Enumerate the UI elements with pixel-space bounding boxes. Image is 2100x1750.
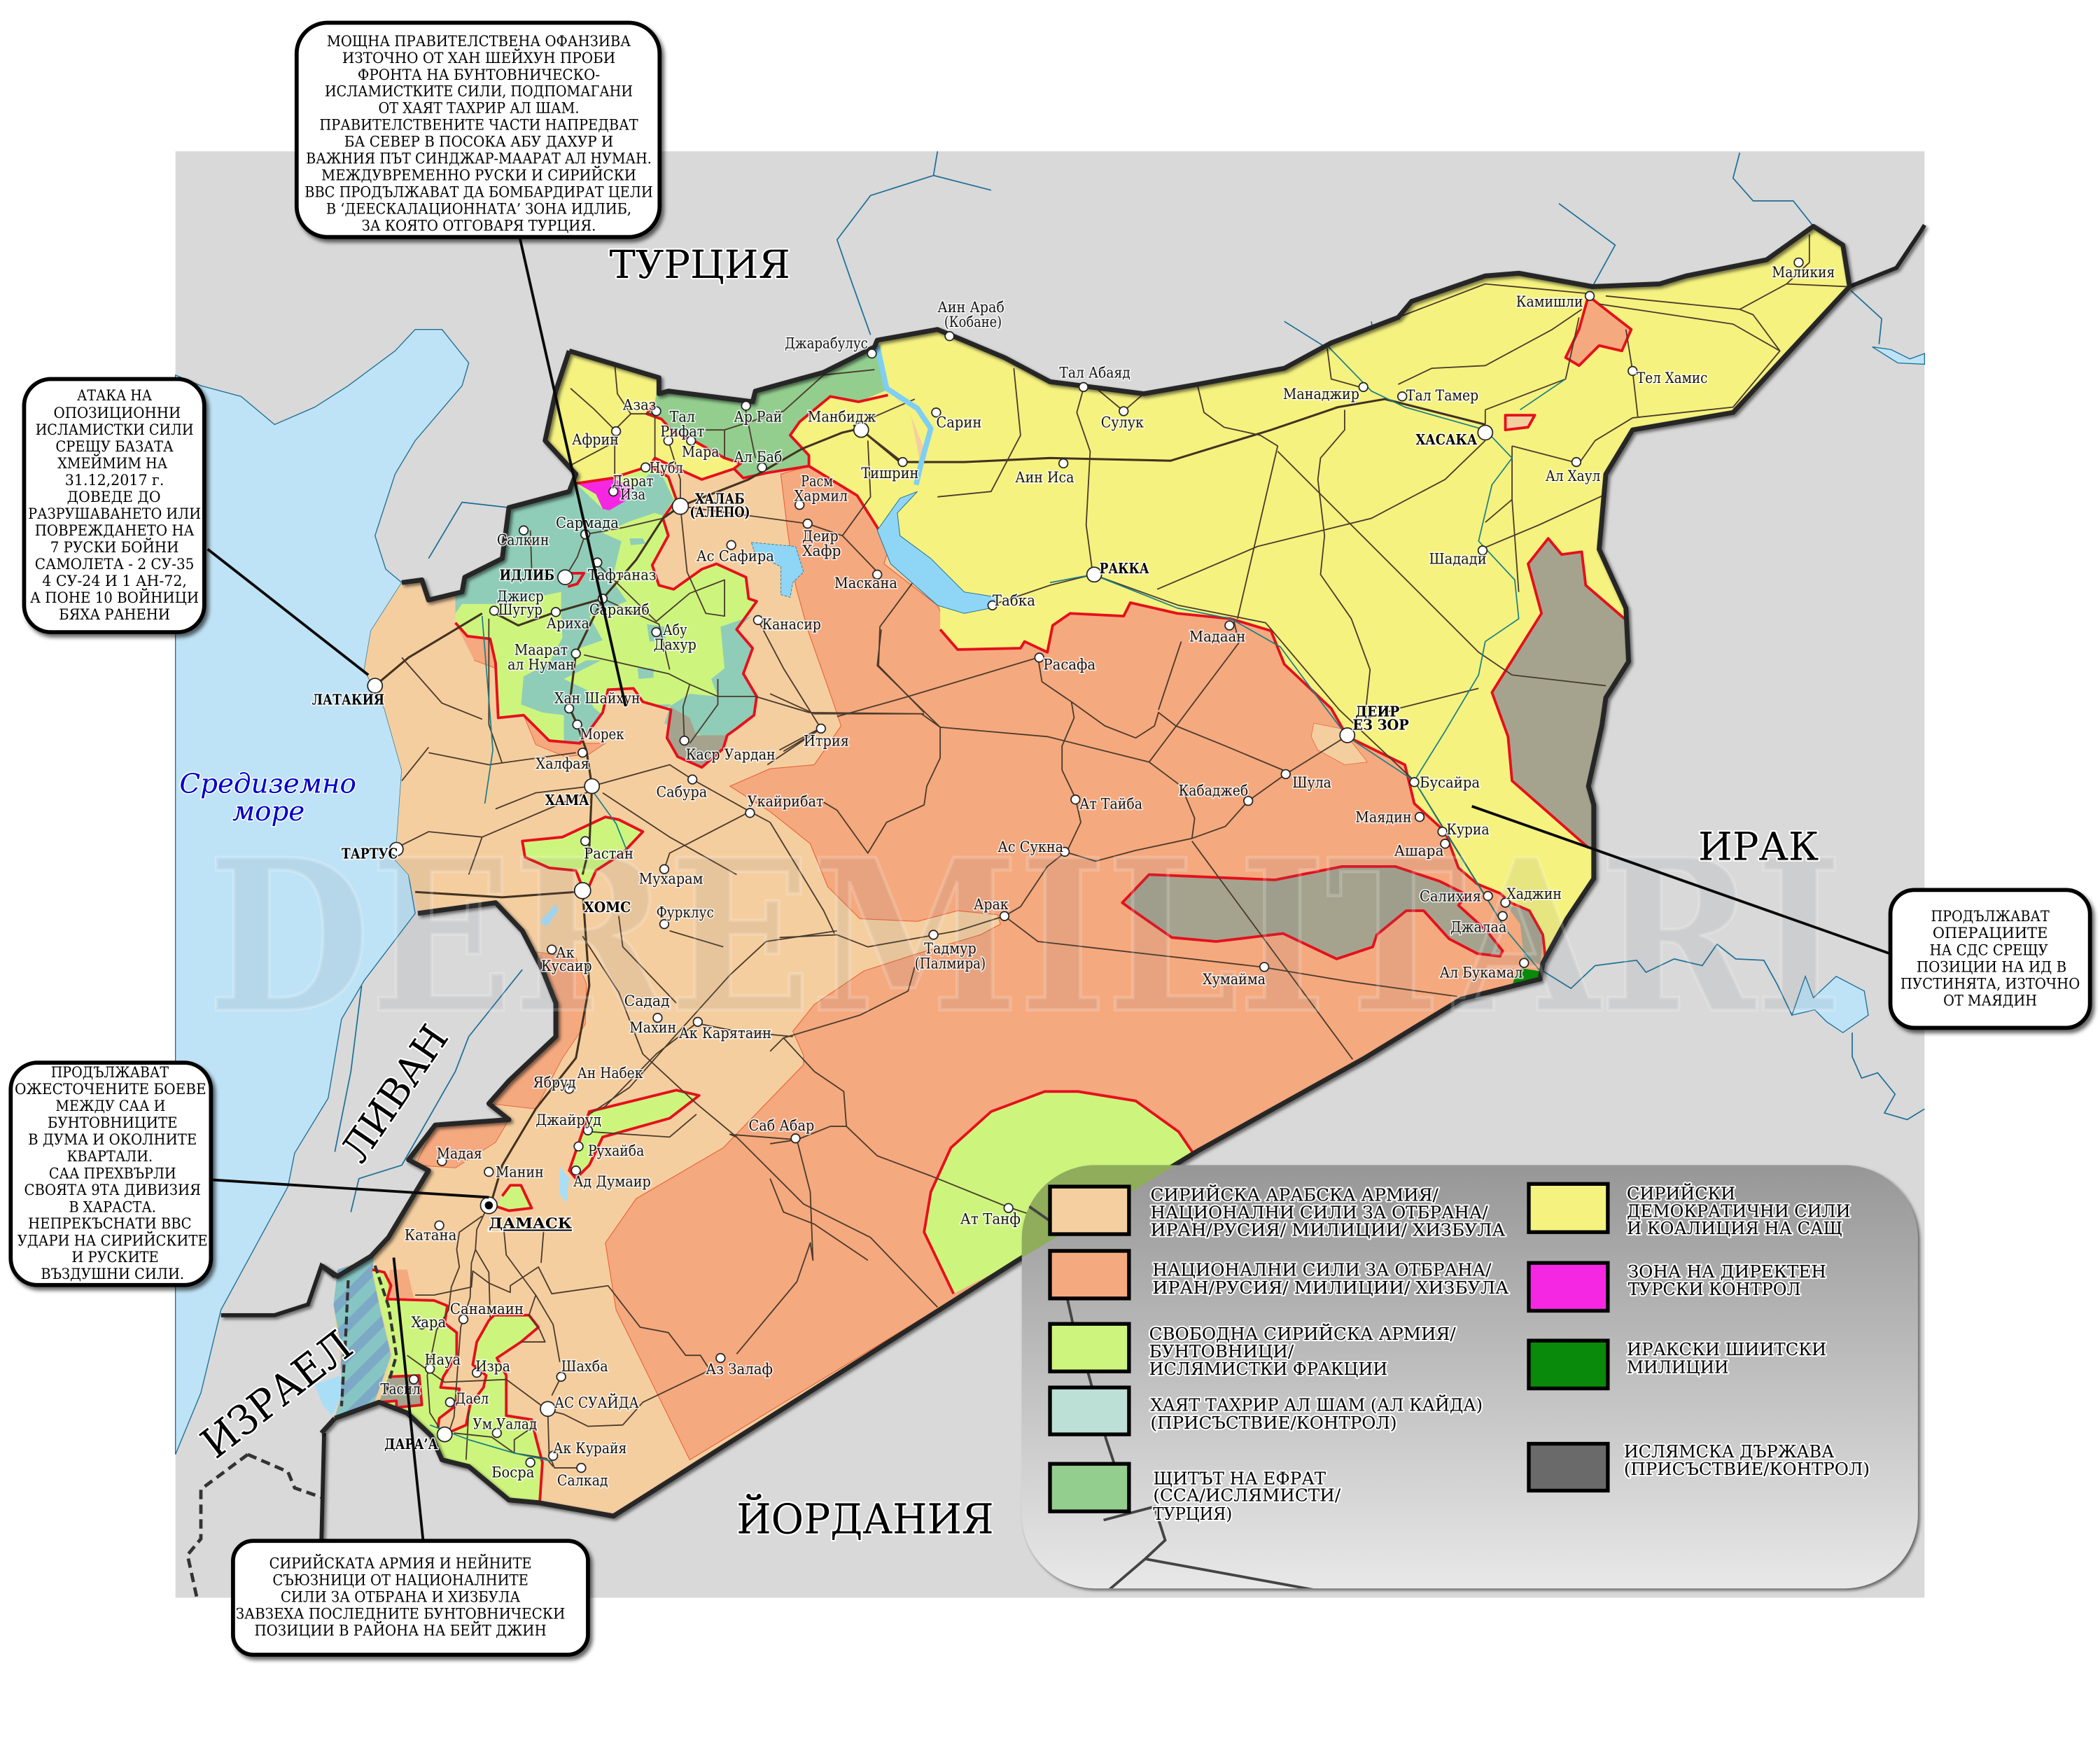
callout: Khan Sheikhoun offensive: В ‘ДЕЕСКАЛАЦИОННАТА’ ЗОНА ИДЛИБ, — [326, 201, 631, 218]
city labels: Маскана — [834, 574, 897, 592]
callout: SDF operations: ПРОДЪЛЖАВАТ — [1931, 908, 2050, 925]
city labels: Маарат — [514, 641, 568, 659]
roads — [375, 234, 1847, 1468]
city labels: Ашара — [1394, 842, 1443, 860]
heading: Mediterranean sea — [179, 769, 356, 827]
legend: Syrian Arab Army: НАЦИОНАЛНИ СИЛИ ЗА ОТБРАНА/ — [1150, 1203, 1488, 1222]
city labels: ХАСАКА — [1415, 431, 1478, 448]
callout: Khan Sheikhoun offensive — [297, 23, 659, 237]
zone: Eastern Ghouta — [497, 1185, 532, 1211]
legend: Iraqi Shia militias: ИРАКСКИ ШИИТСКИ — [1627, 1340, 1826, 1359]
zone: national defence forces east — [606, 466, 1546, 1460]
callout: Khan Sheikhoun offensive: ПРАВИТЕЛСТВЕНИТЕ ЧАСТИ НАПРЕДВАТ — [319, 117, 638, 134]
legend: Syrian Arab Army: СИРИЙСКА АРАБСКА АРМИЯ/ — [1150, 1184, 1439, 1205]
zone: rebel Idlib light green — [455, 468, 755, 741]
city labels: Катана — [405, 1226, 456, 1244]
callout: Douma fighting: ПРОДЪЛЖАВАТ — [51, 1064, 169, 1082]
city labels: Саракиб — [589, 601, 650, 618]
city labels: Рухайба — [588, 1142, 644, 1159]
city labels: ЛАТАКИЯ — [312, 691, 384, 708]
zone: Afrin and Tal Rifaat yellow — [547, 354, 738, 482]
city labels: Маликия — [1772, 263, 1835, 281]
city labels: Аин Араб — [937, 298, 1004, 316]
city labels: Ар Рай — [734, 408, 782, 426]
city labels: Садад — [624, 992, 670, 1009]
legend: national defence forces — [1050, 1251, 1509, 1298]
city labels: Бусайра — [1420, 774, 1480, 791]
callout: Hmeimim attack: 7 РУСКИ БОЙНИ — [50, 537, 178, 556]
callout: Khan Sheikhoun offensive: ВВС ПРОДЪЛЖАВАТ ДА БОМБАРДИРАТ ЦЕЛИ — [304, 184, 653, 202]
legend: Syrian Arab Army: ИРАН/РУСИЯ/ МИЛИЦИИ/ ХИЗБУЛА — [1150, 1220, 1506, 1240]
zone: Eastern Qalamoun — [569, 1090, 699, 1179]
city labels: Ак Курайя — [553, 1439, 626, 1457]
heading: Israel: ИЗРАЕЛ — [192, 1321, 361, 1468]
callout: Douma fighting: БУНТОВНИЦИТЕ — [48, 1114, 178, 1132]
legend: Euphrates Shield: (ССА/ИСЛЯМИСТИ/ — [1153, 1486, 1341, 1506]
callout: Beit Jinn: СИЛИ ЗА ОТБРАНА И ХИЗБУЛА — [281, 1588, 520, 1606]
legend: free Syrian army: ИСЛЯМИСТКИ ФРАКЦИИ — [1149, 1359, 1387, 1379]
legend: Euphrates Shield: ЩИТЪТ НА ЕФРАТ — [1153, 1469, 1326, 1488]
city labels: ИДЛИБ — [500, 566, 554, 583]
callout: Douma fighting: И РУСКИТЕ — [71, 1249, 159, 1266]
callout: Hmeimim attack: ПОВРЕЖДАНЕТО НА — [35, 522, 195, 540]
city labels: Манбидж — [808, 408, 876, 426]
legend: Turkish control — [1529, 1262, 1826, 1311]
legend: Islamic State: (ПРИСЪСТВИЕ/КОНТРОЛ) — [1624, 1460, 1870, 1479]
callout: Douma fighting: ОЖЕСТОЧЕНИТЕ БОЕВЕ — [15, 1081, 206, 1098]
legend: Syrian Democratic Forces — [1529, 1182, 1851, 1238]
legend: Hayat Tahrir al-Sham — [1050, 1387, 1483, 1434]
city labels: Ат Танф — [960, 1210, 1021, 1228]
city labels: Азаз — [623, 396, 657, 413]
city labels: Деир — [802, 527, 839, 545]
city labels: Ум Уалад — [472, 1415, 537, 1432]
city labels: Дарат — [612, 472, 654, 490]
city labels: Сарин — [936, 413, 981, 430]
city labels: Ябруд — [533, 1074, 576, 1091]
small lakes — [315, 904, 569, 1415]
city labels: Рифат — [660, 423, 704, 440]
callout: Khan Sheikhoun offensive: ВАЖНИЯ ПЪТ СИНДЖАР-МААРАТ АЛ НУМАН. — [306, 150, 652, 168]
legend: Euphrates Shield: ТУРЦИЯ) — [1153, 1504, 1232, 1524]
callout: Khan Sheikhoun offensive: ОТ ХАЯТ ТАХРИР АЛ ШАМ. — [378, 100, 579, 118]
city labels: (Палмира) — [915, 954, 986, 972]
callout: SDF operations: ОТ МАЯДИН — [1943, 992, 2037, 1009]
zone: Hasakah regime — [1506, 415, 1535, 430]
city labels: ХОМС — [584, 899, 631, 916]
city labels: Тел Хамис — [1637, 369, 1707, 386]
city labels: Салихия — [1420, 888, 1481, 905]
legend panel — [937, 1150, 1918, 1599]
city labels: Босра — [491, 1463, 534, 1480]
legend: Syrian Democratic Forces: ДЕМОКРАТИЧНИ СИЛИ — [1627, 1202, 1851, 1222]
city labels: Тал — [670, 408, 695, 426]
legend: Syrian Democratic Forces: И КОАЛИЦИЯ НА САЩ — [1627, 1219, 1842, 1238]
city labels: Каср Уардан — [686, 746, 776, 763]
rivers inside Syria — [430, 346, 1566, 1461]
city labels: Камишли — [1516, 293, 1583, 310]
city labels: Ал Хаул — [1546, 467, 1600, 484]
Syria border — [321, 226, 1849, 1516]
zone: ISIS pocket Qasr Wardan — [667, 707, 727, 767]
callout: Douma fighting: В ХАРАСТА. — [69, 1198, 156, 1216]
legend: Islamic State — [1529, 1442, 1870, 1490]
legend: Syrian Arab Army — [1050, 1184, 1506, 1240]
city labels: Табка — [993, 592, 1035, 609]
city labels: Изра — [475, 1357, 510, 1375]
At Tanf showing through legend — [937, 1150, 1365, 1599]
city labels: Ад Думаир — [573, 1172, 651, 1190]
city labels: Итрия — [804, 732, 849, 750]
legend: Turkish control: ЗОНА НА ДИРЕКТЕН — [1628, 1262, 1826, 1282]
callout: Douma fighting: МЕЖДУ САА И — [55, 1098, 165, 1115]
zone: Golan — [333, 1258, 391, 1417]
callout: Hmeimim attack: САМОЛЕТА - 2 СУ-35 — [35, 556, 194, 573]
heading: Iraq: ИРАК — [1698, 825, 1819, 869]
city labels — [312, 263, 1835, 1489]
city labels: Манаджир — [1283, 385, 1359, 402]
watermark: DEREMILITARI — [208, 815, 1843, 1060]
city labels: Тал Абаяд — [1059, 364, 1130, 382]
city labels: Шадади — [1429, 550, 1487, 567]
callout: Beit Jinn — [233, 1541, 588, 1655]
legend: national defence forces: НАЦИОНАЛНИ СИЛИ ЗА ОТБРАНА/ — [1152, 1261, 1492, 1280]
zone: Tasil ISIS — [379, 1376, 422, 1408]
city labels: Канасир — [762, 615, 821, 633]
city labels: Халфая — [536, 755, 589, 772]
city labels: Науа — [425, 1351, 461, 1368]
city labels: Ал Баб — [734, 448, 782, 465]
city labels: Хафр — [802, 542, 841, 559]
legend: Iraqi Shia militias: МИЛИЦИИ — [1627, 1357, 1728, 1377]
city labels: Хармил — [794, 487, 848, 505]
zone: Euphrates Shield green — [649, 349, 886, 477]
city labels: Аз Залаф — [706, 1360, 773, 1378]
zone: Turkish control magenta — [578, 478, 634, 510]
city labels: Кабаджеб — [1179, 781, 1248, 799]
legend: Iraqi Shia militias — [1529, 1340, 1826, 1388]
teal patches — [629, 538, 666, 679]
city labels: Ан Набек — [578, 1064, 643, 1082]
legend: Syrian Democratic Forces: СИРИЙСКИ — [1627, 1182, 1735, 1203]
city labels: Махин — [629, 1018, 676, 1036]
callout: Beit Jinn: ЗАВЗЕХА ПОСЛЕДНИТЕ БУНТОВНИЧЕСКИ — [236, 1606, 565, 1623]
heading: Mediterranean sea: море — [232, 796, 304, 827]
callout: SDF operations: ОПЕРАЦИИТЕ — [1933, 925, 2047, 942]
Golan ceasefire dashed lines — [342, 1266, 396, 1406]
callout: Khan Sheikhoun offensive: МОЩНА ПРАВИТЕЛСТВЕНА ОФАНЗИВА — [327, 33, 631, 50]
zone: HTS teal north — [456, 474, 673, 746]
callout: Douma fighting — [10, 1063, 211, 1285]
city labels: Мадаан — [1189, 627, 1245, 645]
callout: Khan Sheikhoun offensive: МЕЖДУВРЕМЕННО РУСКИ И СИРИЙСКИ — [321, 165, 636, 185]
callout: Khan Sheikhoun offensive: ИСЛАМИСТКИТЕ СИЛИ, ПОДПОМАГАНИ — [325, 83, 633, 101]
callout: Hmeimim attack: ДОВЕДЕ ДО — [67, 489, 161, 506]
zone: Iraqi Shia militias — [1512, 968, 1540, 986]
callout: Hmeimim attack: ИСЛАМИСТКИ СИЛИ — [36, 421, 193, 439]
zone: HTS teal east — [643, 616, 757, 735]
background map frame — [176, 151, 1924, 1598]
legend: Hayat Tahrir al-Sham: (ПРИСЪСТВИЕ/КОНТРОЛ) — [1150, 1413, 1397, 1433]
lake at Turkey-Iraq border — [1872, 347, 1924, 364]
Euphrates river — [877, 346, 931, 485]
city labels: Мухарам — [639, 870, 704, 888]
city labels: Даел — [456, 1390, 489, 1407]
Mediterranean sea — [176, 330, 469, 1455]
city labels: Джайруд — [536, 1111, 601, 1128]
legend: free Syrian army — [1050, 1323, 1456, 1379]
callout: Hmeimim attack: РАЗРУШАВАНЕТО ИЛИ — [28, 505, 201, 523]
control zones — [333, 230, 1847, 1501]
city labels: Африн — [572, 430, 619, 448]
city labels: Хаджин — [1506, 885, 1562, 902]
callout: Hmeimim attack: 31.12,2017 г. — [65, 472, 164, 489]
city labels: Джалаа — [1450, 918, 1506, 936]
city labels: Нубл — [650, 458, 683, 476]
zone: Ar Rastan pocket — [522, 817, 643, 895]
zone: Daraa rebels west — [372, 1270, 542, 1506]
callout: Khan Sheikhoun offensive: ИЗТОЧНО ОТ ХАН ШЕЙХУН ПРОБИ — [342, 48, 615, 67]
callout: Douma fighting: УДАРИ НА СИРИЙСКИТЕ — [18, 1230, 208, 1250]
callout: SDF operations — [1891, 890, 2090, 1028]
heading: Mediterranean sea: Средиземно — [179, 769, 356, 800]
city labels: ТАРТУС — [342, 845, 398, 862]
city labels: Манин — [496, 1163, 544, 1181]
zone: western orange pockets — [415, 623, 606, 1168]
callout: Douma fighting: САА ПРЕХВЪРЛИ — [49, 1165, 176, 1182]
city labels: Расм — [801, 472, 833, 490]
Syria base territory — [333, 226, 1849, 1516]
city labels: Сармада — [556, 514, 619, 531]
city labels: Шугур — [498, 601, 542, 618]
city labels: Мадая — [437, 1144, 482, 1162]
callout: Khan Sheikhoun offensive: ЗА КОЯТО ОТГОВАРЯ ТУРЦИЯ. — [362, 217, 596, 234]
city labels: Ас Сукна — [997, 838, 1063, 855]
city labels: Тафтаназ — [588, 566, 657, 583]
city labels: Тасил — [380, 1380, 421, 1398]
zone: Deir ez Zor regime — [1311, 723, 1367, 764]
city labels: Ал Букамал — [1440, 964, 1522, 981]
callout: Hmeimim attack: СРЕЩУ БАЗАТА — [55, 438, 174, 456]
city labels: Укайрибат — [748, 792, 824, 810]
callout: Khan Sheikhoun offensive: БА СЕВЕР В ПОСОКА АБУ ДАХУР И — [344, 134, 613, 151]
callout: Douma fighting: ВЪЗДУШНИ СИЛИ. — [41, 1266, 184, 1283]
city labels: Джарабулус — [785, 334, 868, 351]
callout: Hmeimim attack: АТАКА НА — [77, 387, 152, 405]
city labels: Салкад — [557, 1471, 608, 1489]
city labels: ХАМА — [545, 792, 589, 808]
city labels: Куриа — [1446, 820, 1490, 838]
callout: Hmeimim attack: ХМЕЙМИМ НА — [57, 453, 167, 472]
legend: Islamic State: ИСЛЯМСКА ДЪРЖАВА — [1624, 1442, 1835, 1462]
zone: ISIS strip near Al Bukamal — [1506, 904, 1543, 965]
city labels: АС СУАЙДА — [554, 1394, 639, 1411]
callout: SDF operations: НА СДС СРЕЩУ — [1930, 941, 2048, 959]
legend: national defence forces: ИРАН/РУСИЯ/ МИЛИЦИИ/ ХИЗБУЛА — [1152, 1278, 1509, 1298]
city labels: ДАРА’А — [384, 1436, 438, 1452]
callout: Douma fighting: СВОЯТА 9ТА ДИВИЗИЯ — [24, 1182, 201, 1199]
zone: ISIS central pocket — [1122, 867, 1503, 959]
legend: Hayat Tahrir al-Sham: ХАЯТ ТАХРИР АЛ ШАМ (АЛ КАЙДА) — [1150, 1394, 1483, 1415]
city labels: ЕЗ ЗОР — [1352, 717, 1409, 734]
legend: free Syrian army: СВОБОДНА СИРИЙСКА АРМИЯ/ — [1149, 1323, 1456, 1344]
heading: Turkey: ТУРЦИЯ — [610, 243, 790, 288]
city labels: Морек — [580, 725, 624, 743]
city labels: Ариха — [547, 614, 589, 631]
city labels: ХАЛАБ — [695, 490, 745, 507]
city labels: Иза — [620, 486, 645, 503]
city labels: (Кобане) — [944, 313, 1002, 330]
city labels: ДАМАСК — [489, 1214, 573, 1231]
zone: SDF north-east yellow — [878, 230, 1847, 952]
zone: Beit Jinn orange — [387, 1270, 414, 1299]
callout: Beit Jinn: СЪЮЗНИЦИ ОТ НАЦИОНАЛНИТЕ — [272, 1572, 528, 1590]
Lake Jabbul — [751, 542, 804, 597]
callout: Hmeimim attack: ОПОЗИЦИОННИ — [54, 405, 181, 422]
city labels: Расафа — [1043, 656, 1096, 673]
city labels: (АЛЕПО) — [690, 504, 750, 521]
city labels: Саб Абар — [749, 1116, 814, 1134]
callout: Douma fighting: КВАРТАЛИ. — [67, 1148, 153, 1166]
city labels: Сабура — [657, 783, 707, 800]
callout: Douma fighting: НЕПРЕКЪСНАТИ ВВС — [28, 1215, 192, 1233]
city labels: Джиср — [497, 587, 544, 605]
callout: Douma fighting: В ДУМА И ОКОЛНИТЕ — [28, 1131, 197, 1149]
legend: free Syrian army: БУНТОВНИЦИ/ — [1149, 1342, 1294, 1362]
city labels: Кусаир — [541, 957, 592, 974]
city labels: Ас Сафира — [696, 547, 774, 565]
zone: ISIS east desert — [1492, 538, 1647, 857]
zone: Qamishli regime — [1566, 296, 1631, 365]
callout: Hmeimim attack: А ПОНЕ 10 ВОЙНИЦИ — [30, 587, 199, 607]
city labels: Шула — [1292, 774, 1331, 791]
city labels: Тишрин — [861, 464, 919, 482]
city labels: Санамаин — [450, 1300, 524, 1317]
callout leader lines — [208, 237, 1890, 1541]
callout: SDF operations: ПОЗИЦИИ НА ИД В — [1917, 959, 2066, 976]
city labels: Тадмур — [924, 939, 976, 957]
heading: Jordan: ЙОРДАНИЯ — [736, 1493, 994, 1544]
city labels: РАККА — [1100, 560, 1149, 577]
legend: Turkish control: ТУРСКИ КОНТРОЛ — [1628, 1280, 1801, 1299]
city labels: ДЕИР — [1355, 704, 1400, 720]
callout: Beit Jinn: ПОЗИЦИИ В РАЙОНА НА БЕЙТ ДЖИН — [255, 1620, 547, 1639]
callout: Khan Sheikhoun offensive: ФРОНТА НА БУНТОВНИЧЕСКО- — [358, 66, 600, 84]
front lines — [372, 296, 1631, 1503]
city labels: Мара — [682, 442, 719, 460]
city labels: Хумайма — [1203, 970, 1266, 988]
city labels: Абу — [663, 621, 687, 638]
callout: Beit Jinn: СИРИЙСКАТА АРМИЯ И НЕЙНИТЕ — [270, 1553, 532, 1572]
Lake Assad — [877, 491, 997, 613]
city labels: Арак — [974, 895, 1009, 913]
heading: Lebanon: ЛИВАН — [332, 1017, 458, 1170]
lake in Iraq — [1792, 976, 1868, 1032]
city labels: Ак — [556, 944, 575, 961]
zone: At Tanf rebels — [924, 1091, 1201, 1294]
neighbouring country borders — [221, 225, 1924, 1540]
city labels: Растан — [584, 844, 634, 862]
dashed West Bank line — [188, 1455, 321, 1598]
callout: SDF operations: ПУСТИНЯТА, ИЗТОЧНО — [1900, 976, 2080, 993]
city labels: Хара — [411, 1313, 446, 1331]
city labels: ал Нуман — [507, 656, 575, 673]
neighbouring borders and rivers — [188, 151, 1924, 1598]
zone: Manbij yellow — [792, 391, 920, 528]
city labels: Хан Шайхун — [554, 689, 640, 706]
city labels: Тал Тамер — [1406, 386, 1478, 404]
city labels: Аин Иса — [1015, 468, 1074, 486]
city labels: Ат Тайба — [1079, 795, 1142, 813]
callout: Hmeimim attack: 4 СУ-24 И 1 АН-72, — [42, 573, 187, 590]
city labels: Фурклус — [657, 904, 714, 921]
city labels: Маядин — [1355, 808, 1412, 826]
callout: Hmeimim attack — [24, 379, 204, 632]
city labels: Шахба — [561, 1357, 608, 1375]
city labels: Дахур — [654, 636, 696, 653]
city labels: Салкин — [497, 531, 549, 549]
callout: Hmeimim attack: БЯХА РАНЕНИ — [59, 606, 170, 624]
city labels: Ак Карятаин — [679, 1024, 771, 1042]
city labels: Сулук — [1101, 413, 1144, 430]
city markers — [368, 258, 1803, 1472]
legend: Euphrates Shield — [1050, 1464, 1341, 1524]
